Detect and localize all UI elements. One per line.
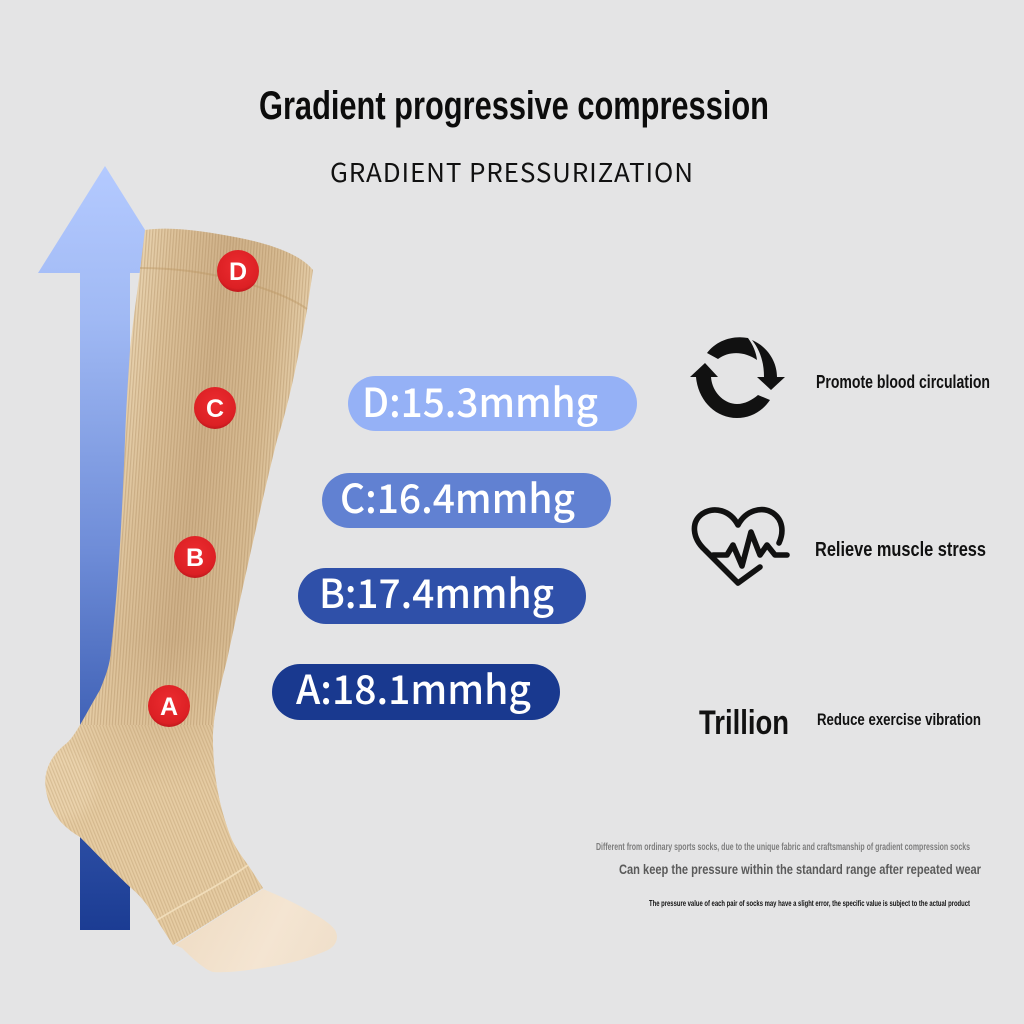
marker D bbox=[217, 250, 259, 292]
sock ribbing lower bbox=[45, 725, 263, 944]
label: relieve muscle stress: Relieve muscle stress bbox=[815, 539, 986, 561]
ankle lightening bbox=[45, 675, 263, 945]
label: reduce exercise vibration: Reduce exercise vibration bbox=[817, 710, 981, 729]
heel patch bbox=[46, 761, 90, 812]
sock body bbox=[45, 229, 313, 945]
sock on foot bbox=[28, 220, 337, 972]
icon: circulation arrows bbox=[690, 337, 785, 418]
icon: heart with pulse bbox=[694, 510, 787, 583]
marker A: A bbox=[160, 693, 178, 721]
pill A value: A:18.1mmhg bbox=[296, 658, 531, 716]
top cuff seam bbox=[140, 268, 307, 309]
marker D: D bbox=[229, 258, 247, 286]
marker C bbox=[194, 387, 236, 429]
marker A bbox=[148, 685, 190, 727]
foot form bbox=[175, 889, 337, 972]
subtitle: GRADIENT PRESSURIZATION bbox=[330, 153, 693, 190]
title: Gradient progressive compression bbox=[259, 84, 769, 128]
label: trillion: Trillion bbox=[699, 704, 789, 742]
pill D value: D:15.3mmhg bbox=[362, 371, 598, 429]
pill B value: B:17.4mmhg bbox=[319, 562, 554, 620]
marker C: C bbox=[206, 395, 224, 423]
marker B: B bbox=[186, 544, 204, 572]
sock ribbing upper bbox=[82, 228, 313, 725]
pill C value: C:16.4mmhg bbox=[340, 467, 575, 525]
marker B bbox=[174, 536, 216, 578]
gradient upward arrow bbox=[38, 166, 172, 930]
bottom cuff seam bbox=[157, 865, 248, 920]
